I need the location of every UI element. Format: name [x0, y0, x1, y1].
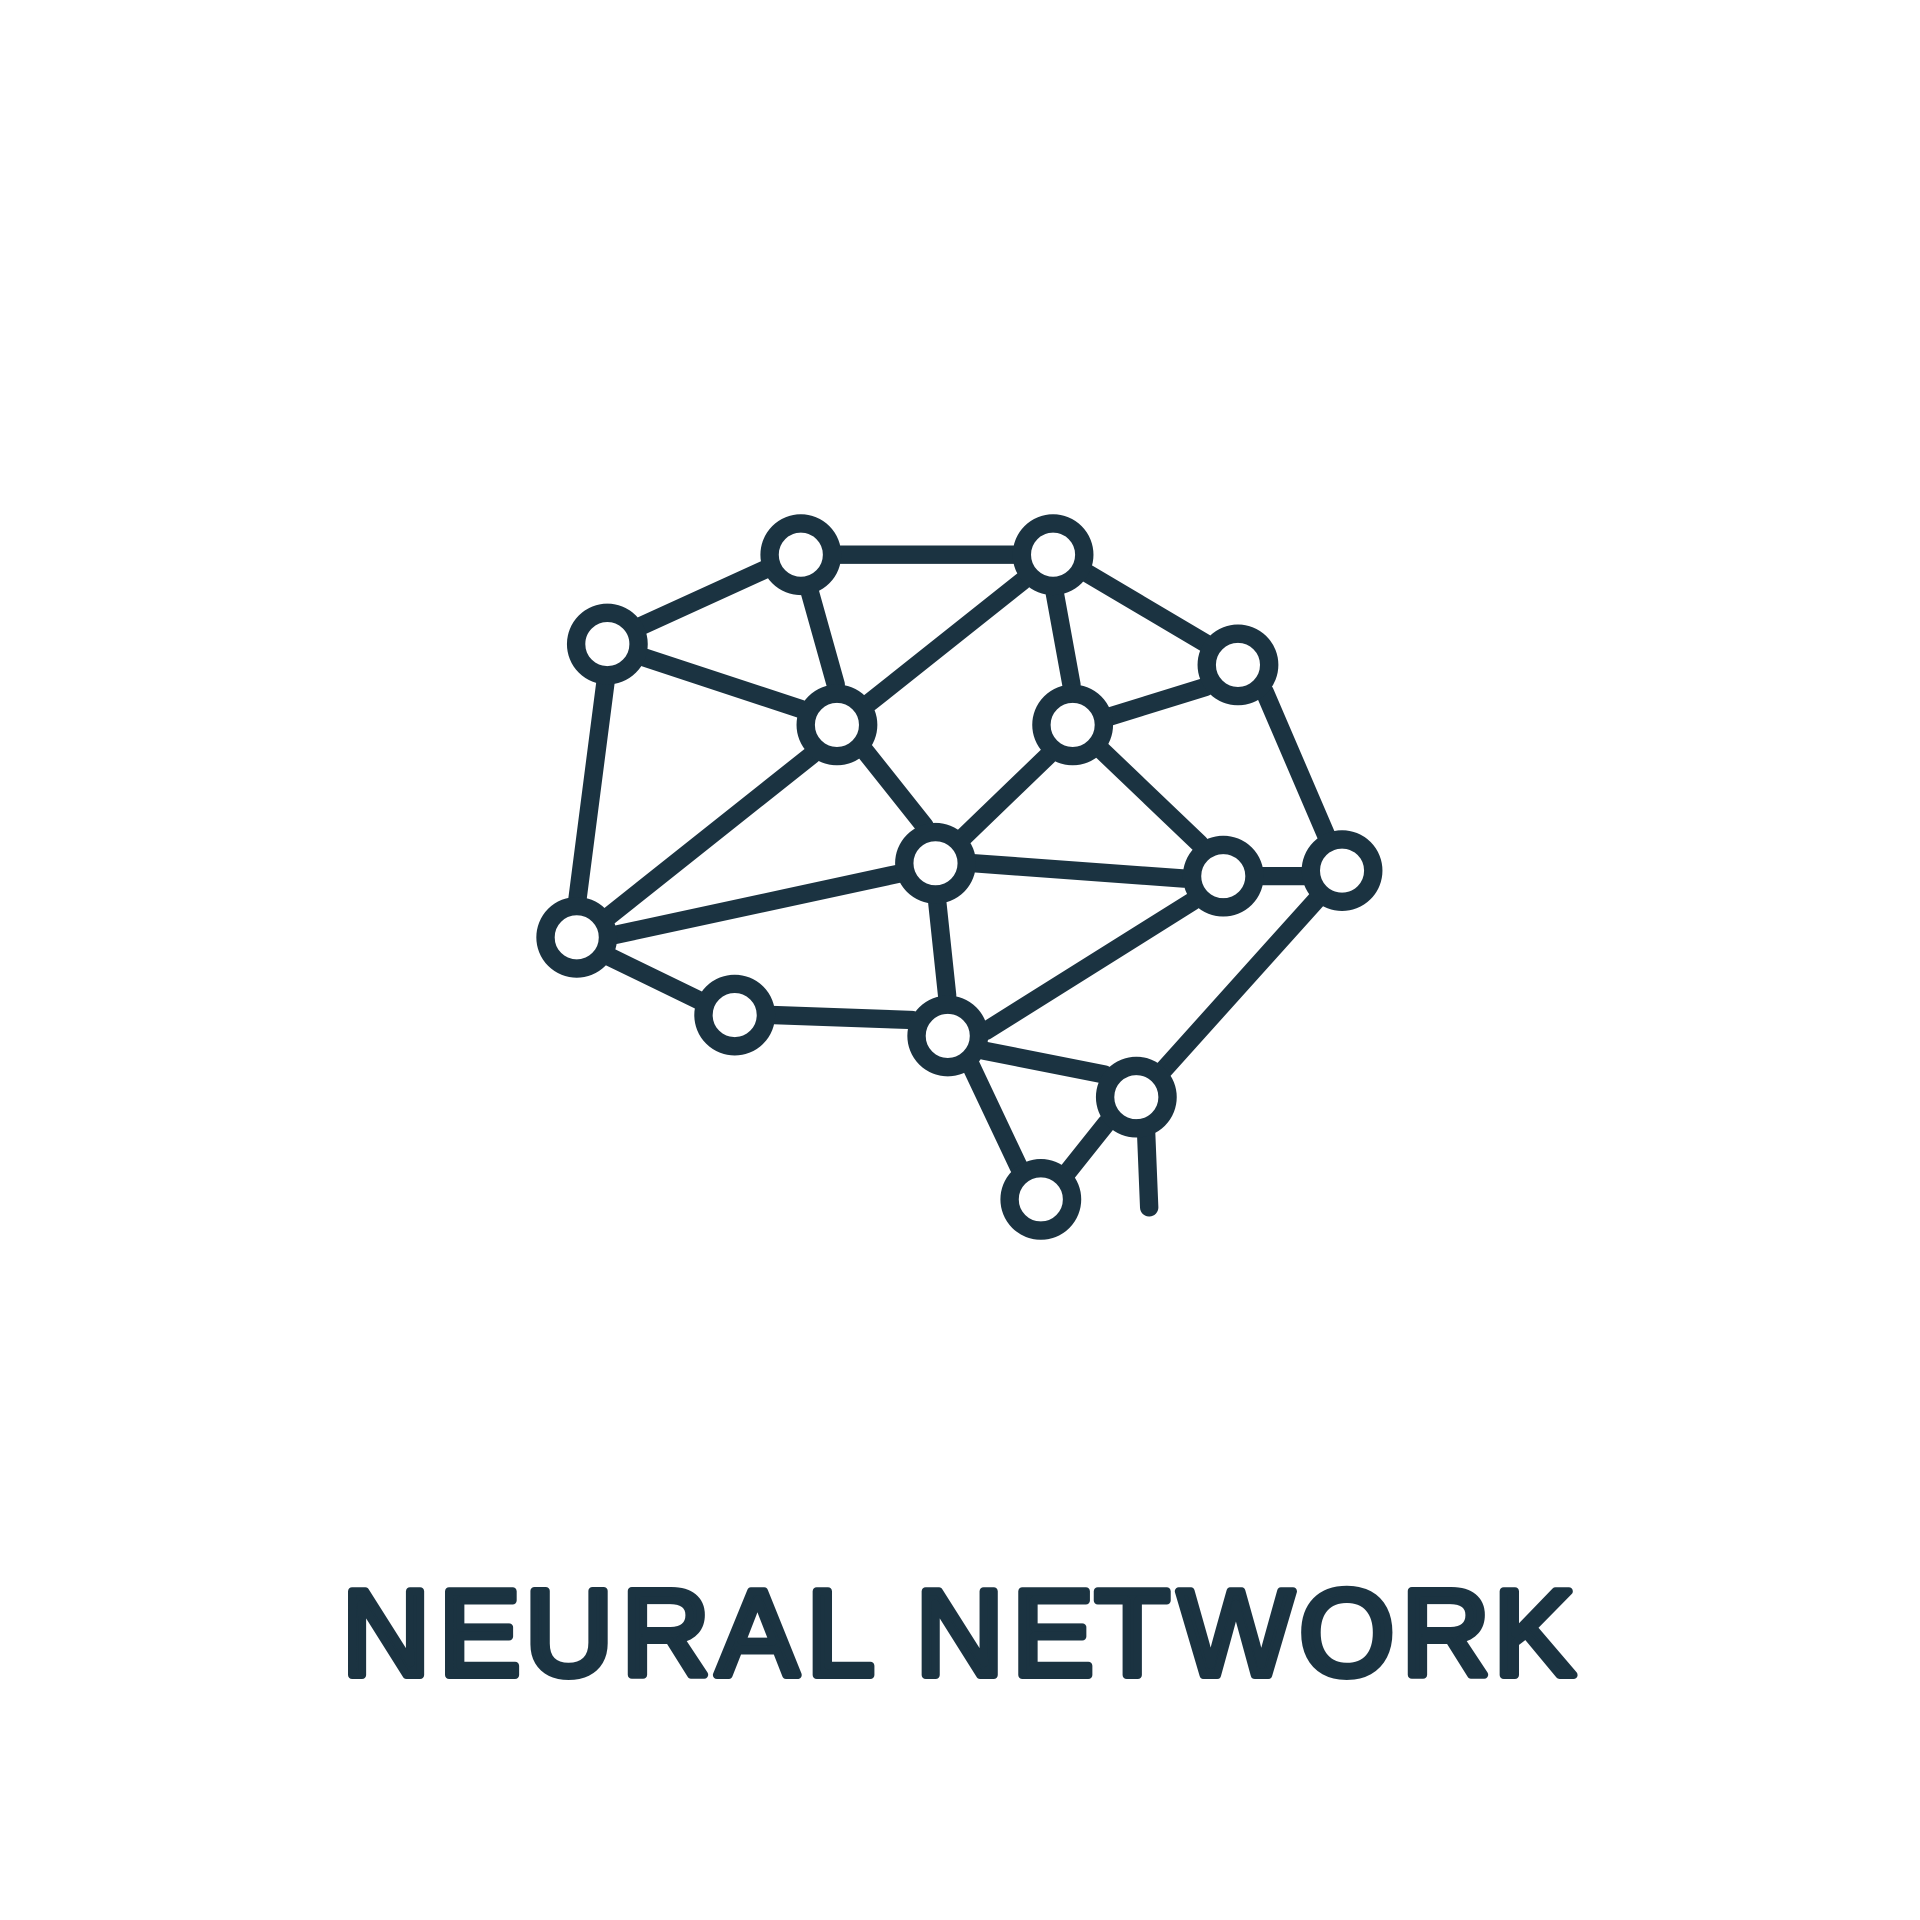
network nodes — [546, 523, 1373, 1231]
title: NEURAL NETWORK — [342, 1565, 1575, 1701]
icon: neural network brain — [546, 523, 1373, 1231]
network connections — [577, 555, 1326, 1207]
